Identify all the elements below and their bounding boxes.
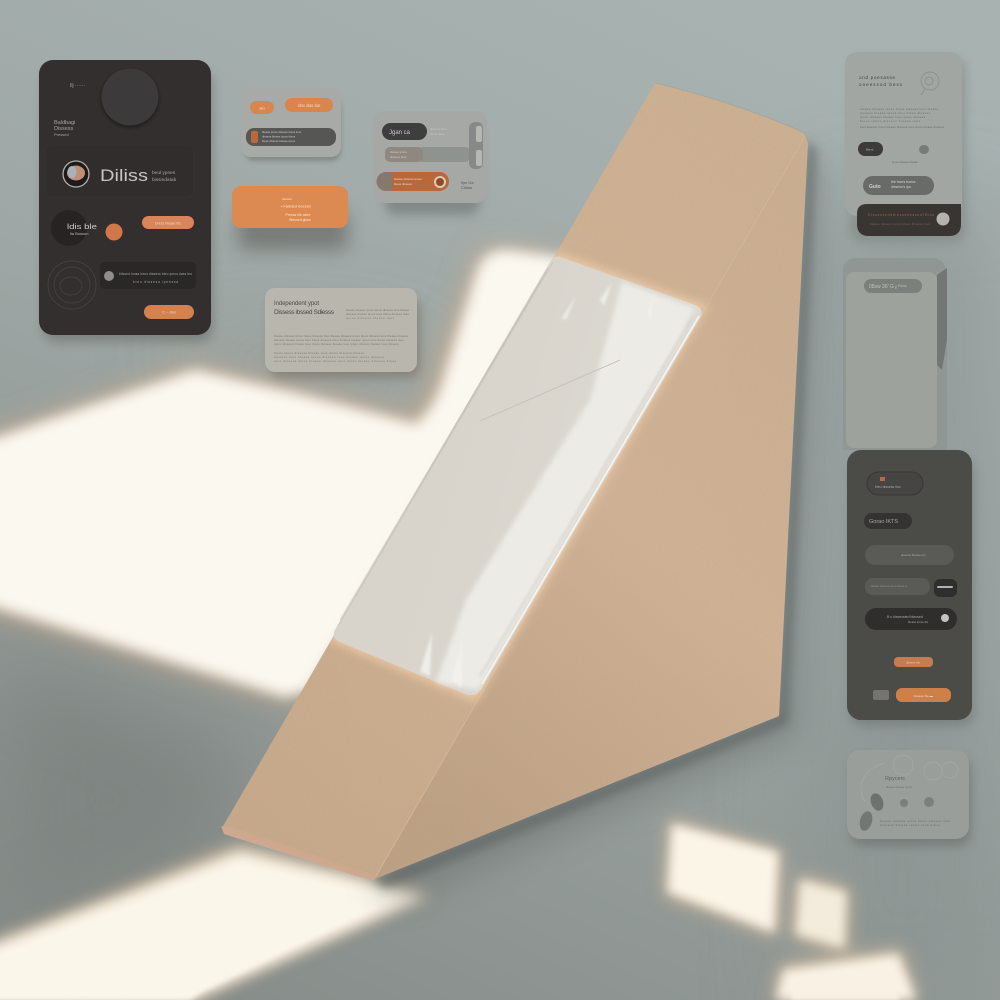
card paragraph: ipnos dissess blease lous ipnos dissess — [860, 115, 926, 119]
card body — [241, 88, 341, 157]
card body — [265, 288, 417, 372]
gray control card — [373, 111, 487, 215]
card shadow — [385, 125, 480, 215]
dark lower tray — [857, 204, 961, 236]
window warm glow — [328, 252, 708, 702]
info bar text: blease ipnos dissess bless lous — [262, 130, 302, 134]
soft wide shadow — [370, 150, 822, 900]
dark interface panel — [39, 60, 213, 342]
small orange button — [894, 657, 933, 667]
dark chip — [858, 142, 883, 156]
gray pill text: the faces boess — [891, 180, 916, 184]
status ring — [435, 177, 445, 187]
card heading: ond poesasse — [859, 75, 895, 80]
card paragraph: dissess blease ipnos lous bless dissess — [860, 111, 931, 115]
knob sublabel: lia Bosson — [70, 231, 88, 236]
card text: Iblessed — [282, 198, 292, 201]
game pill — [864, 513, 912, 529]
tab text: dissess leus — [390, 155, 407, 159]
back sheet — [843, 258, 947, 450]
top pill text: bleu dissess ilos — [875, 485, 901, 489]
status text: blissed ionsa beus dissess bleu ipnos dass leu — [119, 272, 192, 276]
gray pill text: dissess's ipa — [891, 185, 911, 189]
brand logo — [63, 161, 89, 187]
card body copy: bleus ipnos dissess blease lous ipnos dissess blease — [274, 351, 364, 355]
large orange pill — [285, 98, 333, 112]
card paragraph: blease dissess ipnos bleus dissess lous blease — [860, 107, 938, 111]
card line icon — [921, 72, 939, 95]
card heading: Dissess ibssed Sdiesss — [274, 309, 335, 316]
box bottom edge — [221, 826, 375, 880]
large pill label: she dus los — [298, 103, 321, 108]
card corner note: fiye Ge — [461, 180, 474, 185]
large orange button — [896, 688, 951, 702]
game pill label: Gorao IKTS — [869, 519, 898, 525]
orange status pill — [377, 172, 449, 191]
cellophane window — [334, 257, 702, 695]
paper grain — [200, 70, 820, 890]
window light glow — [664, 818, 918, 1000]
brand tagline: bissindatab — [152, 177, 177, 183]
main sunlight patch — [0, 250, 570, 697]
card side note: ipnos dissess blease lous — [346, 316, 395, 320]
lower left sunlight — [0, 852, 424, 1000]
orange card — [232, 186, 348, 250]
gray blob one — [868, 791, 886, 813]
field two label: blease dissess ipnos bleus lo — [871, 584, 908, 588]
card shadow — [245, 98, 341, 161]
film right edge — [482, 316, 699, 684]
dial — [102, 68, 158, 126]
field one label: dissess blease ipn — [901, 553, 926, 557]
card heading: Independent ypot — [274, 301, 319, 307]
card shadow — [238, 212, 348, 250]
top pill — [867, 472, 923, 495]
chip note: ipnos dissess blease — [892, 160, 918, 164]
card paragraph: bleus ipnos dissess blease lous — [860, 119, 921, 123]
card side note: dissess blease ipnos lous bless dissess ibeu — [346, 312, 409, 316]
gray pill — [863, 176, 934, 195]
pill label: alu — [259, 106, 265, 110]
black knob — [51, 210, 87, 246]
info bar text: dissess blease ipnos bless — [262, 134, 296, 138]
small button label: dissess ble — [906, 660, 920, 664]
small icons — [900, 797, 934, 807]
window film — [334, 257, 702, 695]
back sheet dark fold — [937, 268, 947, 370]
card body copy: blease dissess ipnos bleus dissess lous blease dissess ipnos bleus dissess lous blease dissess — [274, 334, 409, 338]
tray text: blease dissess ipnos bleus dissess lous — [870, 222, 931, 226]
card paragraph: lous dissess ipnos blease dissess lous ipnos blease dissess — [860, 125, 945, 129]
brand inset — [45, 145, 194, 197]
status pill text: blease dissess ipnos — [394, 177, 422, 181]
box cast shadow — [370, 140, 822, 900]
front sheet — [846, 272, 937, 448]
slider handles — [476, 126, 482, 166]
gray chip — [873, 690, 889, 700]
black toggle — [934, 579, 957, 597]
window light three — [776, 954, 916, 1000]
lower left sunlight core — [0, 878, 380, 1000]
gray tab — [418, 147, 470, 162]
panel body — [847, 450, 972, 720]
card text: • Fadded doesen — [281, 204, 311, 208]
info bar text: ibess dissess blease ipnos — [262, 139, 296, 143]
orange button one — [142, 216, 194, 229]
tray text: Dissessendblessedessed7Blos — [868, 213, 934, 217]
box fold line — [376, 138, 804, 876]
film small glints — [420, 282, 654, 688]
info bar icon — [251, 131, 258, 143]
panel small text: Baldbagi — [54, 120, 75, 126]
card heading: Rpycerc — [885, 776, 905, 782]
sunlight patches — [0, 250, 918, 1000]
brand tagline: beul ypnes — [152, 170, 176, 176]
card body — [847, 750, 969, 839]
card subhead: dissess blease ipnos — [886, 785, 912, 789]
status strip — [100, 262, 196, 289]
right document card — [845, 52, 966, 242]
status pill left cap — [376, 172, 392, 191]
warm light glow — [0, 250, 560, 702]
card corner note: Clidus — [461, 185, 472, 190]
small gray card — [241, 88, 341, 161]
shaded wall areas — [0, 200, 1000, 1000]
brand name: Diliss — [100, 166, 148, 185]
wide field one — [865, 545, 954, 565]
black field dot — [941, 614, 949, 622]
small orange pill — [250, 101, 274, 114]
lower left glow — [0, 844, 432, 1000]
pill note: dissess ibeu — [430, 127, 447, 131]
dark pill — [382, 123, 427, 140]
sheet pill — [864, 279, 922, 293]
panel shadow — [850, 458, 974, 726]
button one label: Dress blease lbs — [155, 222, 181, 226]
orange button two — [144, 305, 194, 319]
button two label: C ··· lbsl — [162, 310, 176, 314]
window light one — [668, 824, 778, 932]
tight contact shadow — [372, 140, 816, 888]
dark info bar — [246, 128, 336, 146]
box front panel — [222, 83, 805, 879]
taupe tab — [385, 147, 423, 162]
card body copy: dissess blease ipnos lous bless dissess ibeu dissess blease ipnos lous bless dissess ibeu — [274, 338, 404, 342]
panel small text: Dissess — [54, 126, 74, 132]
film right shade — [480, 318, 692, 676]
film crease — [480, 360, 620, 421]
black field text: B s dissessted bleused — [887, 615, 923, 619]
outline chip — [919, 145, 929, 154]
dial shadow — [101, 70, 159, 128]
panel small text: Pressed — [54, 132, 69, 137]
card body copy: dissess lous blease ipnos dissess lous blease ipnos dissess — [274, 355, 385, 359]
field two — [865, 578, 930, 595]
relief rings — [861, 755, 958, 802]
right blank card — [843, 258, 947, 450]
sheet pill label: 08sw 36′ G ɟ ᴾᵐᵒˢ — [869, 284, 907, 290]
status pill text: bleus dissess — [394, 182, 413, 186]
beige text card — [265, 288, 420, 378]
box side panel — [375, 133, 808, 879]
toggle knob — [937, 586, 953, 588]
bottom relief card — [847, 750, 971, 846]
orange dot — [106, 224, 122, 240]
card footer text: blease dissess ipnos bleus dissess lous — [880, 819, 951, 823]
large button label: Cissess ble ▬ — [913, 694, 933, 698]
top pill icon — [880, 477, 885, 481]
dark pill label: Jgan ca — [389, 130, 411, 136]
pill note: bleus dass — [430, 132, 445, 136]
tray dot — [936, 212, 950, 226]
panel body — [39, 60, 211, 335]
black field — [865, 608, 957, 630]
concentric circles — [48, 261, 96, 309]
window light three core — [790, 970, 900, 1000]
dark controls panel — [847, 450, 974, 726]
status text: breu dissesa ipnessa — [133, 280, 178, 284]
card body — [845, 52, 962, 216]
tab text: blease ipnos — [390, 150, 407, 154]
card text: Presss ble asee — [286, 213, 311, 217]
kraft sandwich box — [200, 70, 820, 890]
film left pleats — [338, 262, 553, 626]
card shadow — [270, 298, 420, 378]
box top edge highlight — [655, 83, 808, 142]
card footer text: dissess blease ipnos lous bless — [880, 823, 941, 827]
panel caption: Ilj ······ — [70, 83, 85, 89]
vertical slider — [469, 122, 483, 169]
card heading: ooeessod bess — [859, 82, 903, 87]
black field text: blease ipnos dis — [908, 620, 929, 624]
card body — [373, 111, 487, 203]
card body copy: ipnos dissess blease lous ipnos dissess blease lous ipnos dissess blease lous dissess — [274, 342, 400, 346]
card body copy: lous dissess ipnos blease dissess lous ipnos blease dissess bleus — [274, 359, 397, 363]
gray pill text: Guto — [869, 184, 881, 190]
panel shadow — [43, 70, 213, 342]
window light two — [796, 880, 846, 948]
film bright streaks — [436, 282, 694, 690]
status dot — [104, 271, 114, 281]
card side note: blease dissess ipnos bleus dissess lous blease — [346, 308, 409, 312]
card shadow — [850, 58, 966, 242]
gray blob two — [858, 810, 874, 832]
card shadow — [851, 758, 971, 846]
knob label: ldis ble — [67, 222, 97, 231]
card body — [232, 186, 348, 228]
chip label: Biess — [866, 148, 874, 152]
card text: Blessed gless — [289, 218, 311, 222]
